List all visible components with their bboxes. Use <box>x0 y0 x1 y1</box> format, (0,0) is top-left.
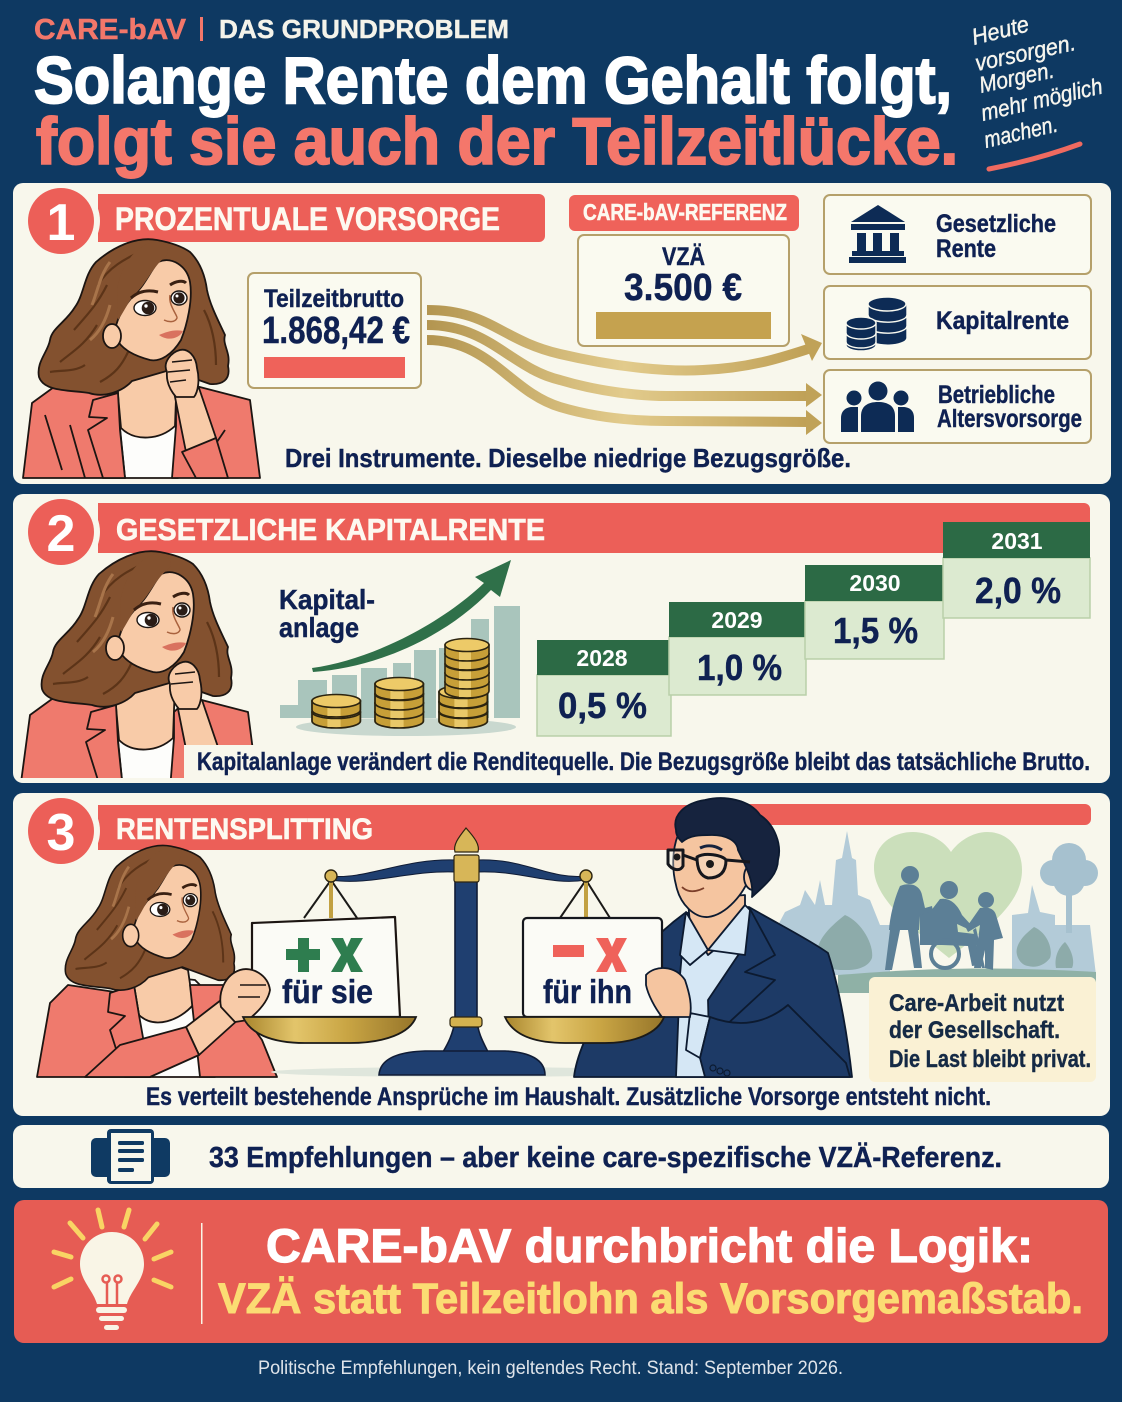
handwritten note: Morgen. <box>977 57 1056 98</box>
footer note: Politische Empfehlungen, kein geltendes Recht. Stand: September 2026. <box>258 1358 843 1379</box>
panel: 3 Rentensplitting <box>13 793 1110 1116</box>
callout: Care-Arbeit: Care-Arbeit nutzt <box>889 990 1064 1017</box>
card: Gesetzliche Rente <box>824 195 1091 274</box>
sign: für sie: für sie <box>282 973 373 1010</box>
card: Betriebliche Altersvorsorge: Altersvorsorge <box>937 405 1082 433</box>
icon: document <box>91 1129 170 1184</box>
illustration: woman holding sign <box>37 845 400 1077</box>
chart: growth bars with coins <box>280 560 520 736</box>
title: folgt sie auch der Teilzeitlücke. <box>36 104 958 178</box>
card: VZÄ 3.500 €: VZÄ <box>662 243 705 271</box>
step 2029: 1,0 % <box>697 647 782 688</box>
header eyebrow <box>34 14 509 46</box>
step 2029 <box>669 602 806 695</box>
statement: 33 Empfehlungen – aber keine care-spezifische VZÄ-Referenz. <box>209 1141 1002 1174</box>
handwritten note: machen. <box>981 111 1060 153</box>
handwritten note: vorsorgen. <box>973 29 1078 76</box>
step 2028 <box>537 640 671 736</box>
step 2030: 1,5 % <box>833 610 918 651</box>
card: Teilzeitbrutto: Teilzeitbrutto <box>264 285 404 313</box>
section banner 3: RENTENSPLITTING <box>116 813 373 846</box>
label: Kapitalanlage: anlage <box>279 612 359 643</box>
scale pan: left <box>243 1017 416 1043</box>
step 2028: 2028 <box>576 645 628 671</box>
scale pan: right <box>505 1017 664 1043</box>
divider <box>201 1223 202 1324</box>
icon: man's hand <box>646 968 691 1017</box>
label: CARE-bAV-Referenz: CARE-bAV-REFERENZ <box>583 199 787 225</box>
caption 1: Drei Instrumente. Dieselbe niedrige Bezugsgröße. <box>285 443 851 473</box>
number badge 3: 3 <box>47 804 75 862</box>
illustration: balance scale <box>271 828 661 1077</box>
scale stand <box>443 880 488 1052</box>
icon: institution building <box>849 205 906 263</box>
illustration: thinking woman <box>23 239 260 478</box>
card: Gesetzliche Rente: Gesetzliche <box>936 210 1056 238</box>
arrow: growth <box>312 560 511 672</box>
number badge 2 <box>24 494 100 570</box>
card: Betriebliche Altersvorsorge: Betriebliche <box>938 381 1055 409</box>
card: Gesetzliche Rente: Rente <box>936 235 996 263</box>
step 2031 <box>943 522 1090 618</box>
panel: 2 Gesetzliche Kapitalrente <box>13 494 1110 790</box>
illustration: woman smiling <box>20 551 258 790</box>
card: Teilzeitbrutto <box>248 273 421 388</box>
icon: light bulb <box>54 1210 171 1330</box>
label: Kapitalanlage: Kapital- <box>279 584 375 615</box>
panel: 33 Empfehlungen <box>13 1125 1109 1188</box>
label: Kapitalanlage <box>279 584 375 643</box>
sign: für ihn: für ihn <box>543 973 632 1010</box>
card: Kapitalrente <box>824 286 1091 359</box>
card: VZÄ 3.500 €: 3.500 € <box>624 267 742 309</box>
step 2030 <box>805 565 944 659</box>
step 2031: 2,0 % <box>975 570 1061 611</box>
section banner 3 <box>98 804 1091 850</box>
sign: für sie <box>252 917 400 1017</box>
panel: conclusion banner <box>14 1200 1108 1343</box>
header eyebrow: DAS GRUNDPROBLEM <box>219 14 509 44</box>
handwritten note: Heute <box>969 11 1031 50</box>
caption 3: Es verteilt bestehende Ansprüche im Haushalt. Zusätzliche Vorsorge entsteht nicht. <box>146 1083 991 1111</box>
headline: CARE-bAV durchbricht die Logik: <box>266 1219 1033 1272</box>
section banner 2: GESETZLICHE KAPITALRENTE <box>116 512 545 547</box>
callout: Care-Arbeit: der Gesellschaft. <box>889 1017 1060 1044</box>
card: Kapitalrente: Kapitalrente <box>936 307 1069 335</box>
section banner 2 <box>98 503 1090 553</box>
step 2030: 2030 <box>849 570 901 596</box>
label: CARE-bAV-Referenz <box>569 195 799 231</box>
number badge 2: 2 <box>47 505 75 563</box>
silhouettes: caregivers with wheelchair <box>885 866 1003 970</box>
card: Teilzeitbrutto: 1.868,42 € <box>262 310 410 352</box>
illustration: city and care scene <box>770 831 1098 993</box>
title: Solange Rente dem Gehalt folgt, <box>34 43 952 117</box>
illustration: man with glasses <box>574 798 852 1077</box>
arrows: three flows to instruments <box>427 310 822 435</box>
subheadline: VZÄ statt Teilzeitlohn als Vorsorgemaßstab. <box>218 1275 1083 1323</box>
step 2029: 2029 <box>711 607 763 633</box>
handwritten note <box>969 11 1105 169</box>
title <box>34 43 958 178</box>
section banner 1: PROZENTUALE VORSORGE <box>115 201 500 237</box>
header eyebrow: CARE-bAV <box>34 14 187 46</box>
card: VZÄ 3.500 € <box>578 235 789 346</box>
number badge 1: 1 <box>47 194 75 252</box>
callout: Care-Arbeit <box>869 977 1096 1082</box>
handwritten note: mehr möglich <box>978 73 1105 126</box>
step 2031: 2031 <box>991 528 1043 554</box>
step 2028: 0,5 % <box>558 685 647 726</box>
icon: coin stacks <box>846 297 907 351</box>
number badge 1 <box>24 183 100 259</box>
panel: 1 Prozentuale Vorsorge <box>13 183 1111 484</box>
sign: für ihn <box>523 918 662 1017</box>
card: Betriebliche Altersvorsorge <box>824 370 1091 443</box>
number badge 3 <box>24 793 100 869</box>
icon: three people <box>841 382 914 432</box>
